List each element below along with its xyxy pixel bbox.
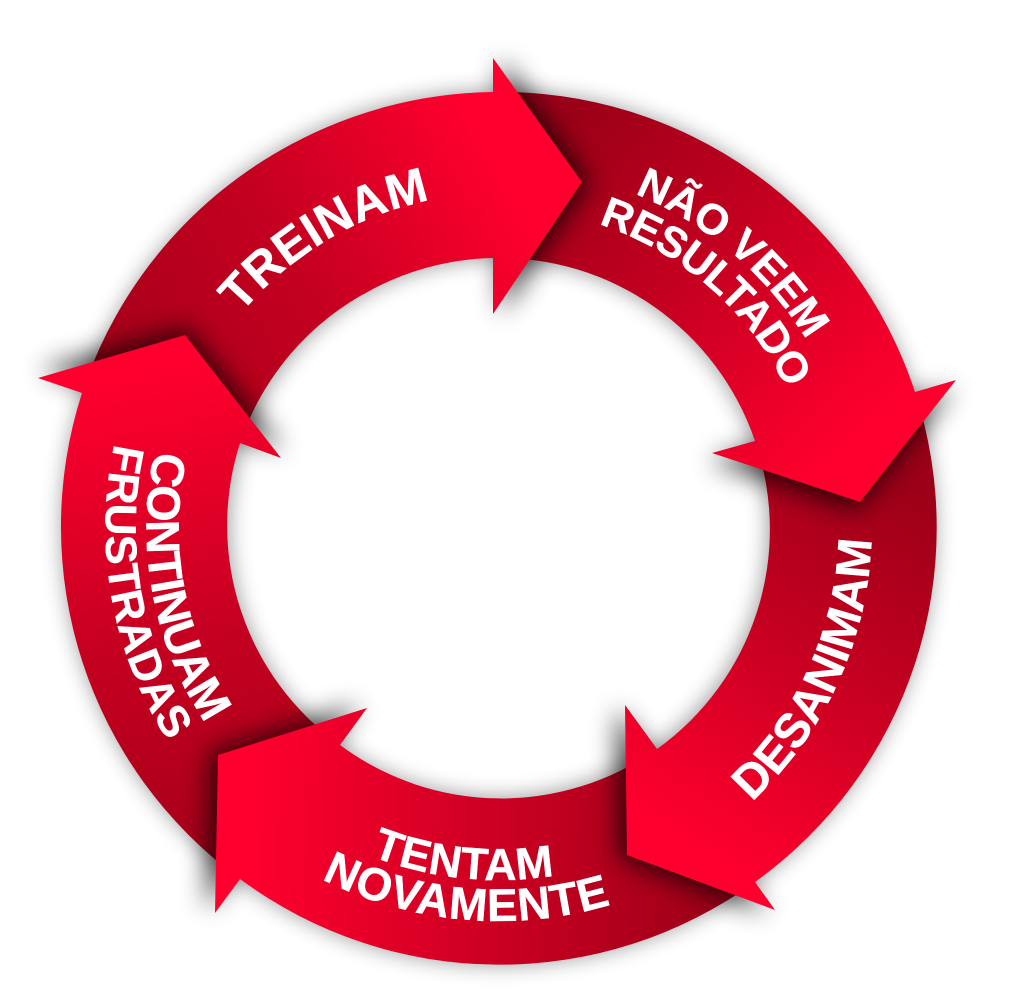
label: TENTAM NOVAMENTE: NOVAMENTE bbox=[324, 851, 610, 922]
label: NÃO VEEM RESULTADO: NÃO VEEM bbox=[637, 168, 830, 338]
label: TENTAM NOVAMENTE: TENTAM bbox=[380, 827, 552, 880]
shadow: continuam arrow head bbox=[40, 327, 283, 450]
label: DESANIMAM: DESANIMAM bbox=[730, 540, 872, 800]
arrow: NÃO VEEM RESULTADO bbox=[493, 92, 956, 502]
arrow: TREINAM head bbox=[280, 58, 582, 314]
label: CONTINUAM FRUSTRADAS bbox=[105, 446, 232, 737]
shadow: treinam arrow head bbox=[501, 58, 590, 314]
arrow: CONTINUAM FRUSTRADAS bbox=[38, 335, 340, 879]
arrow: TREINAM tail bbox=[82, 143, 372, 443]
label: NÃO VEEM RESULTADO: RESULTADO bbox=[601, 196, 808, 382]
arrow: TENTAM NOVAMENTE bbox=[215, 708, 755, 965]
shadow: desanimam arrow head bbox=[617, 708, 767, 913]
shadow: nao veem arrow head bbox=[709, 388, 953, 510]
arrow: DESANIMAM bbox=[625, 392, 937, 910]
shadow: tentam arrow head bbox=[207, 705, 359, 910]
label: CONTINUAM FRUSTRADAS: CONTINUAM bbox=[146, 454, 232, 722]
ring soft shadow bbox=[62, 92, 934, 964]
label: CONTINUAM FRUSTRADAS: FRUSTRADAS bbox=[105, 446, 190, 737]
label: TREINAM: TREINAM bbox=[216, 168, 428, 306]
